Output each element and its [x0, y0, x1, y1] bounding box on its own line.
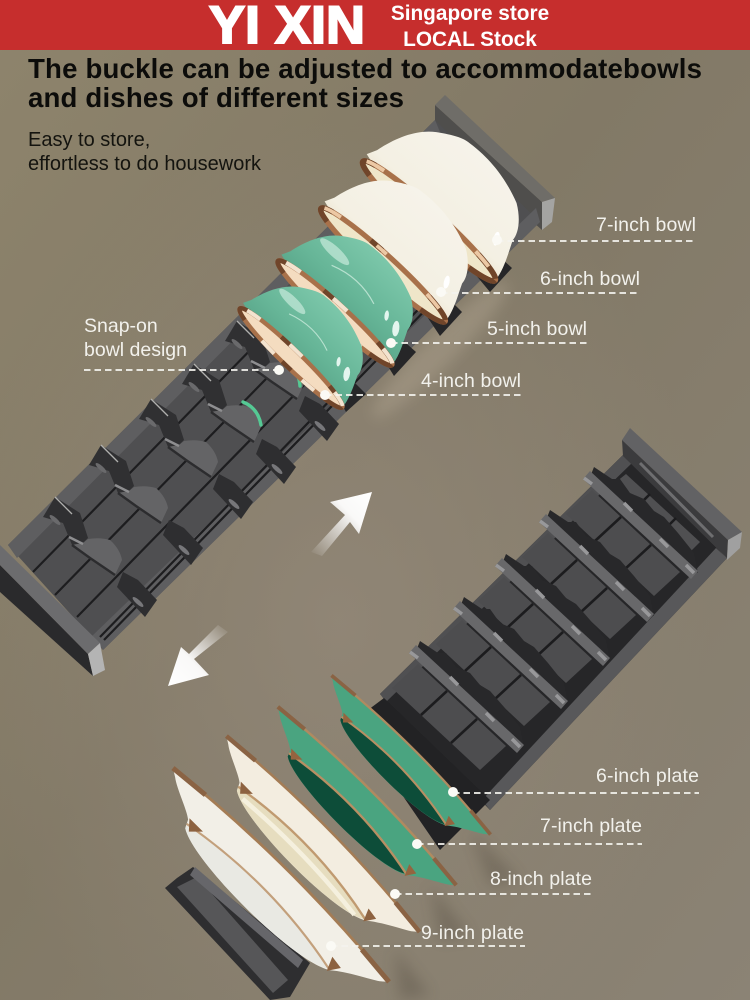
- callout: 6-inch bowl: 6-inch bowl: [540, 268, 640, 290]
- store note: Singapore store: [391, 2, 549, 25]
- callout: 8-inch plate: 8-inch plate: [490, 868, 592, 890]
- callout: 7-inch plate: 7-inch plate: [540, 815, 642, 837]
- callout: 9-inch plate: [326, 922, 525, 951]
- lower end plate of upper rack: [0, 545, 105, 676]
- 6-inch plate: [306, 671, 495, 860]
- dark clips between bowls: [335, 250, 512, 412]
- deck of lower rack: [352, 455, 727, 850]
- arrow: up-right: [311, 492, 372, 556]
- cells of lower rack: [392, 474, 700, 770]
- callout: 5-inch bowl: [386, 318, 587, 348]
- title: [28, 53, 702, 113]
- subtitle: effortless to do housework: [28, 153, 262, 175]
- callout: 4-inch bowl: 4-inch bowl: [421, 370, 521, 392]
- top end plate of lower rack: [622, 428, 742, 560]
- callout: 7-inch bowl: [492, 214, 696, 245]
- 6-inch bowl: [312, 147, 500, 329]
- 7-inch bowl: [354, 96, 552, 289]
- callout: 7-inch bowl: 7-inch bowl: [596, 214, 696, 236]
- ribs of lower rack: [409, 467, 698, 753]
- 9-inch plate: [139, 762, 395, 1000]
- callout: 6-inch bowl: [436, 268, 640, 297]
- lower end of lower rack: [165, 867, 310, 1000]
- callout: snap-on bowl design: bowl design: [84, 339, 187, 361]
- callout: 5-inch bowl: 5-inch bowl: [487, 318, 587, 340]
- 7-inch plate: [250, 702, 461, 913]
- panel: upper rack holding bowls: [0, 95, 555, 676]
- callout: 6-inch plate: 6-inch plate: [596, 765, 699, 787]
- green snap indicator arcs: [243, 365, 300, 425]
- arrow: down-left: [168, 625, 228, 686]
- header band: [0, 0, 750, 55]
- callout: 7-inch plate: [412, 815, 642, 849]
- callout: snap-on bowl design: [84, 315, 284, 375]
- deck of upper rack: [8, 120, 540, 650]
- 4-inch bowl: [233, 258, 390, 414]
- callout: snap-on bowl design: Snap-on: [84, 315, 158, 337]
- callout: 6-inch plate: [448, 765, 699, 797]
- title: and dishes of different sizes: [28, 82, 404, 113]
- panel: lower rack holding plates: [139, 428, 742, 1000]
- top end plate of upper rack: [435, 95, 555, 230]
- callout: 9-inch plate: 9-inch plate: [421, 922, 524, 944]
- subtitle: [28, 129, 262, 175]
- title: The buckle can be adjusted to accommodatebowls: [28, 53, 702, 84]
- snap-on ribs: [43, 321, 339, 617]
- store note: [391, 2, 549, 51]
- store note: LOCAL Stock: [403, 28, 537, 51]
- callout: 4-inch bowl: [320, 370, 521, 400]
- subtitle: Easy to store,: [28, 129, 150, 151]
- callout: 8-inch plate: [390, 868, 592, 899]
- 8-inch plate: [195, 731, 425, 963]
- 5-inch bowl: [270, 205, 442, 372]
